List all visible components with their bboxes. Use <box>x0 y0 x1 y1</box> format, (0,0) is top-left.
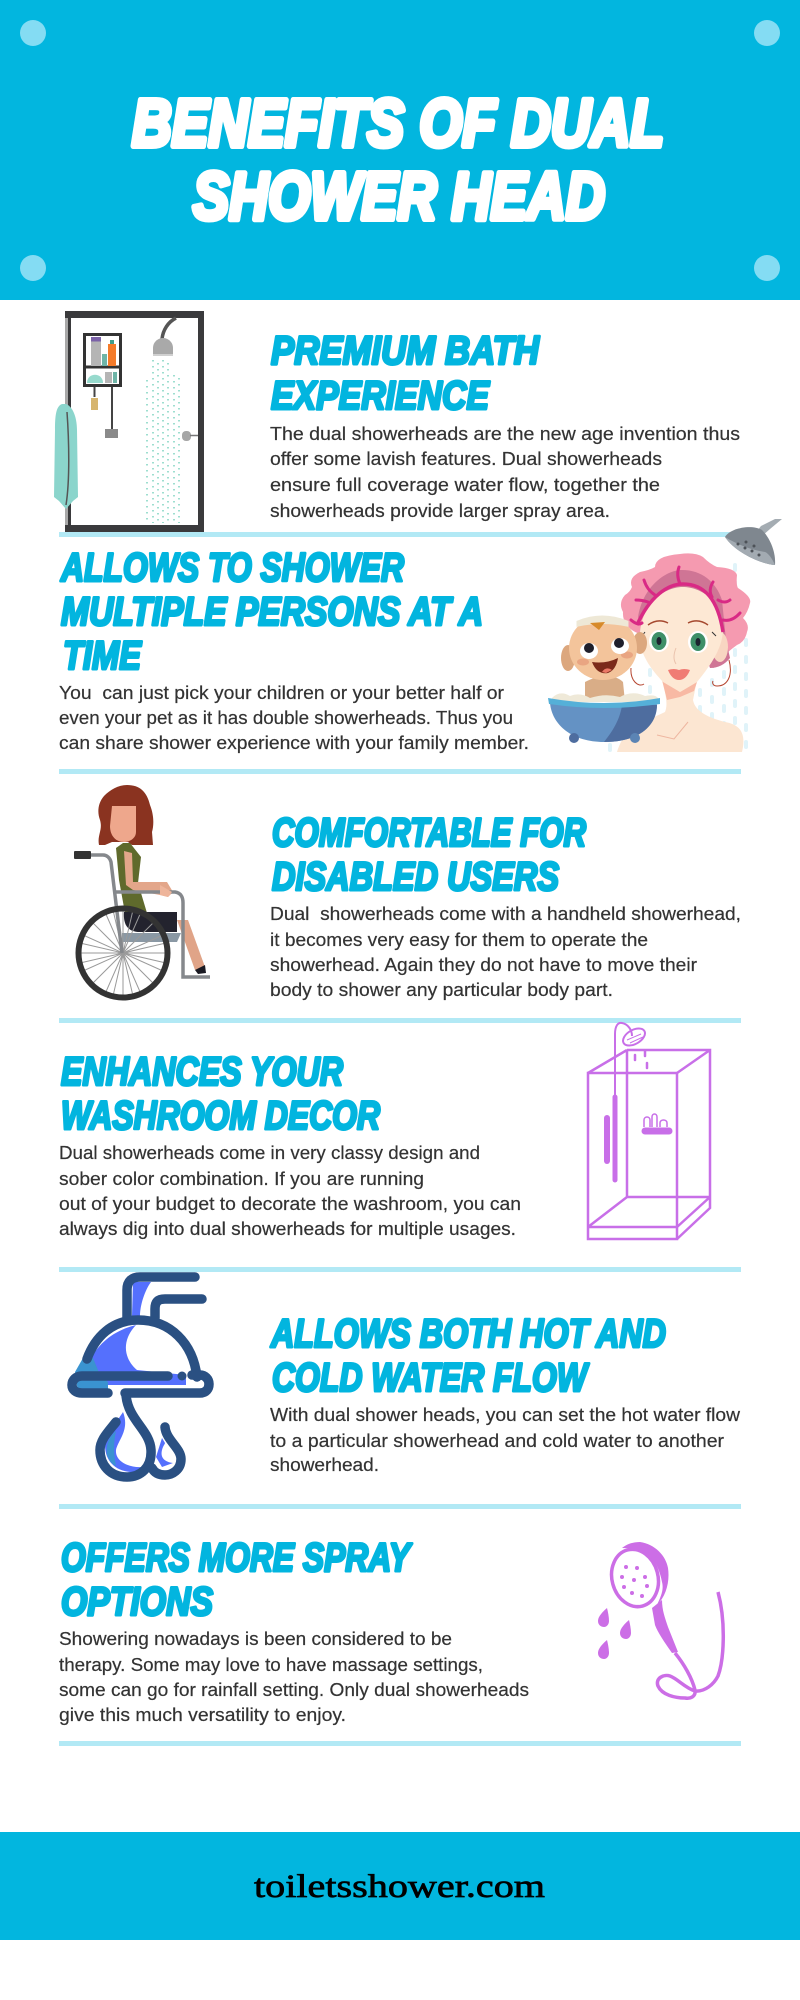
shower head <box>757 519 782 536</box>
heading: ALLOWS BOTH HOT AND <box>270 1312 666 1356</box>
icon: shower cabin outline <box>588 1023 710 1239</box>
footer website: toiletsshower.com <box>254 1869 545 1905</box>
heading <box>270 1312 666 1400</box>
heading: COMFORTABLE FOR <box>272 811 586 855</box>
woman: neck and shoulders <box>617 680 743 752</box>
icon: mother and baby bathing <box>548 519 782 752</box>
title <box>132 86 664 234</box>
body text: give this much versatility to enjoy. <box>59 1705 346 1725</box>
icon: woman in wheelchair <box>74 785 210 998</box>
body text <box>59 1629 529 1725</box>
body text: showerhead. <box>270 1455 379 1475</box>
body text: You can just pick your children or your better half or <box>59 683 504 703</box>
body text: Dual showerheads come in very classy design and <box>59 1143 480 1163</box>
title: SHOWER HEAD <box>193 159 605 234</box>
body text: to a particular showerhead and cold water to another <box>270 1431 724 1451</box>
body text: therapy. Some may love to have massage settings, <box>59 1655 483 1675</box>
body text <box>59 1143 521 1239</box>
panel: spray options <box>59 1536 723 1725</box>
footer banner <box>0 1832 800 1940</box>
heading <box>61 1536 413 1624</box>
body text: can share shower experience with your family member. <box>59 733 529 753</box>
body text: Showering nowadays is been considered to be <box>59 1629 452 1649</box>
panel: washroom decor <box>59 1023 710 1239</box>
heading: COLD WATER FLOW <box>272 1356 590 1400</box>
icon: shower cabin <box>54 311 204 532</box>
body text <box>270 904 741 1000</box>
body text <box>270 1405 741 1475</box>
bath tub <box>552 693 658 702</box>
icon: handheld shower <box>598 1542 723 1698</box>
body text: always dig into dual showerheads for multiple usages. <box>59 1219 516 1239</box>
heading: MULTIPLE PERSONS AT A <box>61 590 483 634</box>
panel: premium bath experience <box>54 311 740 532</box>
woman: shower cap <box>621 553 750 668</box>
body text: offer some lavish features. Dual showerheads <box>270 449 662 469</box>
body text: ensure full coverage water flow, together the <box>270 475 660 495</box>
heading <box>61 1050 380 1138</box>
body text: The dual showerheads are the new age invention thus <box>270 424 740 444</box>
corner dots <box>20 20 780 281</box>
panel: disabled users <box>74 785 741 1000</box>
heading: ENHANCES YOUR <box>61 1050 343 1094</box>
icon: shower with water drops <box>72 1277 209 1477</box>
body text: some can go for rainfall setting. Only dual showerheads <box>59 1680 529 1700</box>
baby <box>585 676 625 702</box>
heading: OFFERS MORE SPRAY <box>61 1536 413 1580</box>
body text: showerhead. Again they do not have to move their <box>270 955 697 975</box>
heading: PREMIUM BATH <box>271 329 540 373</box>
woman: face <box>712 632 728 662</box>
body text: showerheads provide larger spray area. <box>270 501 610 521</box>
panel: multiple persons <box>59 519 782 753</box>
heading <box>60 546 483 678</box>
heading <box>272 811 586 899</box>
body text <box>59 683 529 753</box>
heading: WASHROOM DECOR <box>61 1094 380 1138</box>
heading: EXPERIENCE <box>271 374 490 418</box>
heading: OPTIONS <box>61 1580 213 1624</box>
body text: it becomes very easy for them to operate the <box>270 930 648 950</box>
body text: even your pet as it has double showerheads. Thus you <box>59 708 513 728</box>
body text: With dual shower heads, you can set the hot water flow <box>270 1405 741 1425</box>
heading: ALLOWS TO SHOWER <box>60 546 404 590</box>
body text <box>270 424 740 521</box>
heading: TIME <box>63 634 142 678</box>
heading <box>271 329 540 418</box>
body text: Dual showerheads come with a handheld showerhead, <box>270 904 741 924</box>
title: BENEFITS OF DUAL <box>132 86 664 161</box>
panel: hot and cold water <box>72 1277 741 1477</box>
heading: DISABLED USERS <box>272 855 559 899</box>
body text: sober color combination. If you are running <box>59 1169 424 1189</box>
header banner <box>0 0 800 300</box>
body text: out of your budget to decorate the washroom, you can <box>59 1194 521 1214</box>
body text: body to shower any particular body part. <box>270 980 613 1000</box>
